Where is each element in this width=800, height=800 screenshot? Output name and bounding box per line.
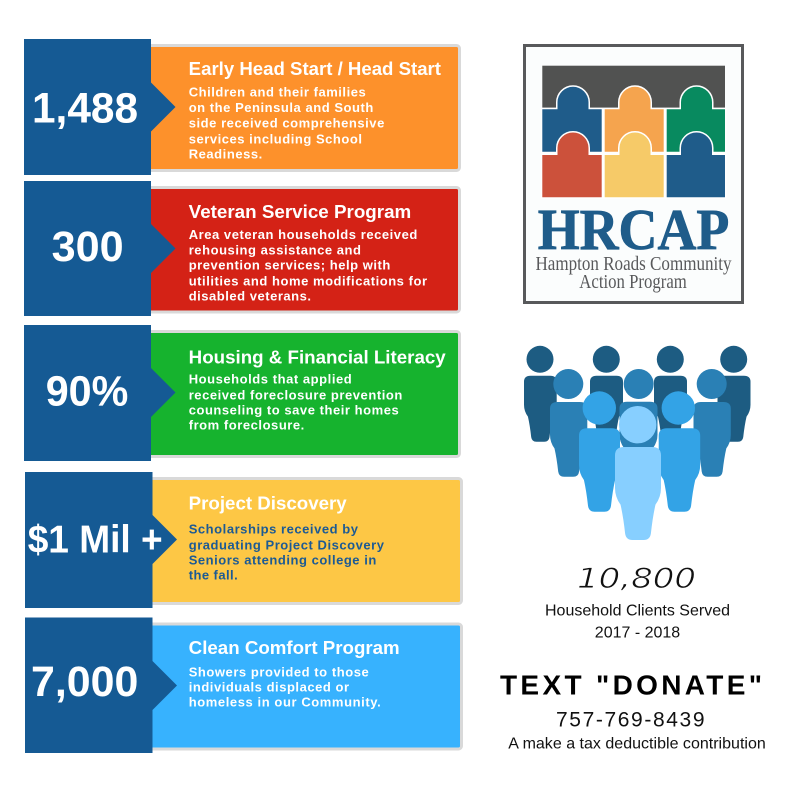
body text: Readiness. xyxy=(189,146,262,161)
body text xyxy=(189,664,381,709)
body text xyxy=(189,521,385,582)
body text: the fall. xyxy=(189,567,238,582)
logo wordmark: HRCAP xyxy=(538,197,729,262)
logo subtitle: Hampton Roads Community xyxy=(536,253,732,275)
body text xyxy=(189,371,402,432)
logo: HRCAP xyxy=(524,46,742,302)
number badge: 300: 300 xyxy=(52,223,124,271)
card: orange xyxy=(145,46,460,170)
card: green xyxy=(145,332,460,456)
body text: from foreclosure. xyxy=(189,417,304,432)
heading: Clean Comfort Program xyxy=(189,637,400,658)
heading: Veteran Service Program xyxy=(189,201,411,222)
panel: Housing and Financial Literacy xyxy=(24,325,460,461)
body text: individuals displaced or xyxy=(189,679,349,694)
body text: on the Peninsula and South xyxy=(189,100,373,115)
body text: services including School xyxy=(189,131,362,146)
stat caption: 2017 - 2018 xyxy=(595,624,680,642)
body text: homeless in our Community. xyxy=(189,694,381,709)
body text: side received comprehensive xyxy=(189,115,384,130)
front figure xyxy=(615,406,661,540)
stat caption xyxy=(545,603,730,642)
card: yellow xyxy=(146,478,462,604)
panel: Early Head Start xyxy=(24,39,460,175)
icon: crowd of people xyxy=(524,346,750,540)
logo frame xyxy=(524,46,742,302)
second row figures xyxy=(550,369,731,477)
body text: prevention services; help with xyxy=(189,258,390,273)
body text: Area veteran households received xyxy=(189,227,417,242)
stat: 10,800: 10,800 xyxy=(577,562,696,594)
heading: Early Head Start / Head Start xyxy=(189,58,441,79)
stat caption: Household Clients Served xyxy=(545,603,730,620)
logo subtitle: Action Program xyxy=(579,271,687,293)
panel: Veteran Service Program xyxy=(24,181,460,316)
number badge: 1,488: 1,488 xyxy=(32,85,138,133)
third row figures xyxy=(579,391,700,512)
donation note: A make a tax deductible contribution xyxy=(508,736,766,753)
body text: counseling to save their homes xyxy=(189,402,399,417)
body text: disabled veterans. xyxy=(189,288,311,303)
body text xyxy=(189,227,427,303)
heading: Housing & Financial Literacy xyxy=(189,346,446,367)
number badge: 90%: 90% xyxy=(46,368,128,416)
number badge: 300 xyxy=(24,181,176,316)
card: red xyxy=(145,188,460,312)
number badge: $1 Mil + xyxy=(25,472,177,608)
call to action: text donate: TEXT "DONATE" xyxy=(500,669,762,700)
body text: utilities and home modifications for xyxy=(189,273,427,288)
body text: received foreclosure prevention xyxy=(189,387,402,402)
card: light blue xyxy=(146,624,462,749)
body text: Showers provided to those xyxy=(189,664,369,679)
body text: graduating Project Discovery xyxy=(189,537,385,552)
phone number: 757-769-8439 xyxy=(556,709,704,732)
number badge: $1 Mil +: $1 Mil + xyxy=(28,518,163,561)
logo subtitle xyxy=(536,253,732,293)
panel: Project Discovery xyxy=(25,472,462,608)
panel: Clean Comfort Program xyxy=(25,618,462,753)
body text: Scholarships received by xyxy=(189,521,359,536)
number badge: 7,000 xyxy=(25,618,177,753)
body text: Children and their families xyxy=(189,84,366,99)
body text: rehousing assistance and xyxy=(189,242,361,257)
number badge: 90% xyxy=(24,325,176,461)
number badge: 1,488 xyxy=(24,39,176,175)
number badge: 7,000: 7,000 xyxy=(31,658,138,706)
body text: Households that applied xyxy=(189,371,352,386)
heading: Project Discovery xyxy=(189,492,347,513)
puzzle mark xyxy=(542,66,725,197)
body text: Seniors attending college in xyxy=(189,552,376,567)
body text xyxy=(189,84,384,161)
back row figures xyxy=(524,346,750,442)
